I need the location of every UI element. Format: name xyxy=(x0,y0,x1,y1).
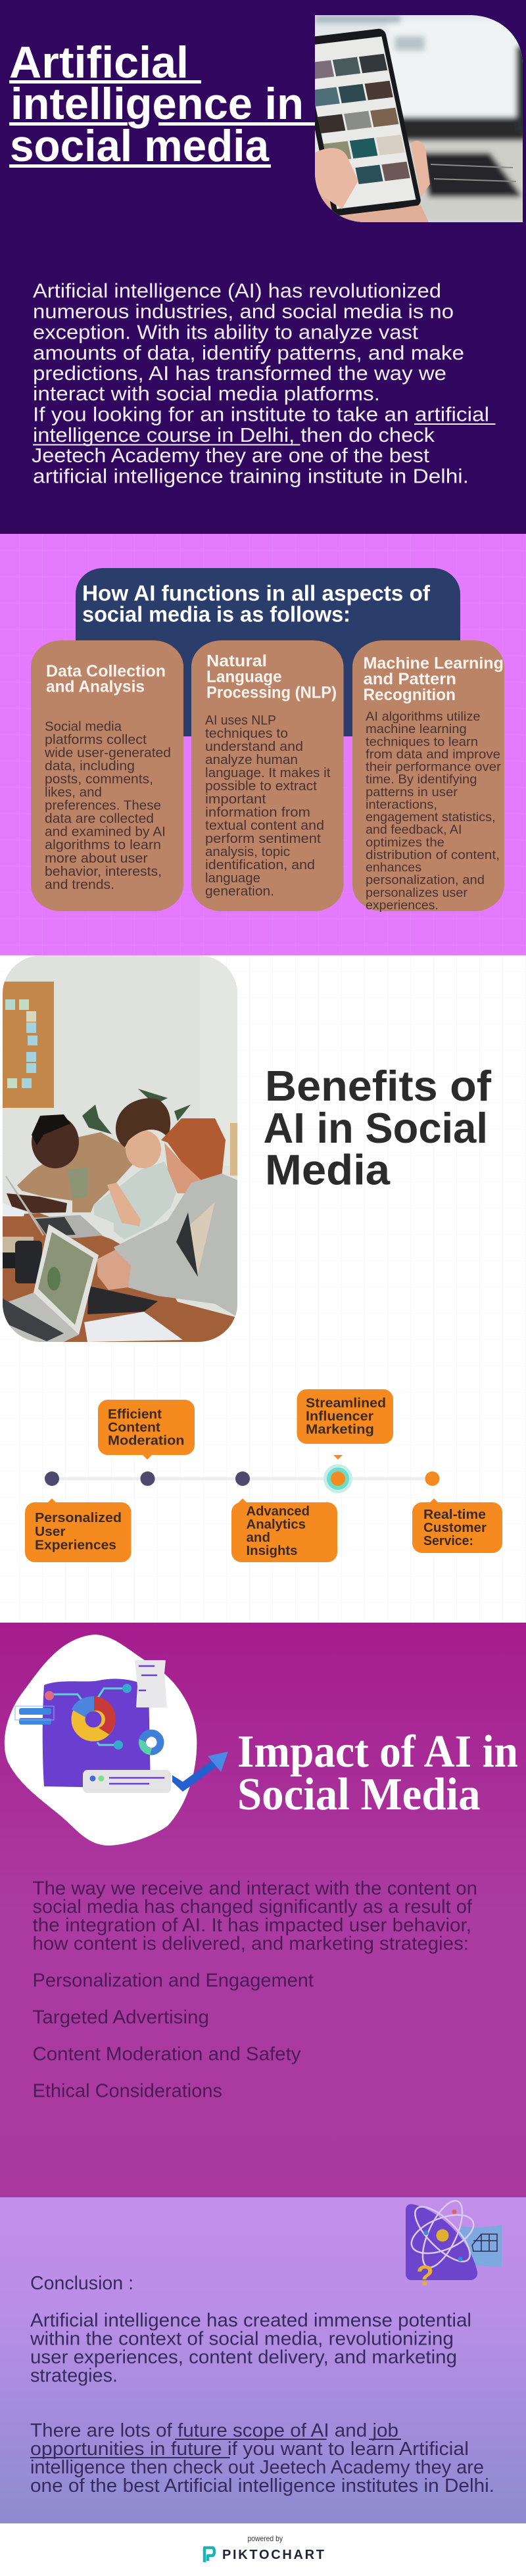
card: natural language processing: textual content and xyxy=(205,818,324,833)
conclusion paragraph: strategies. xyxy=(30,2365,118,2386)
title: social media xyxy=(10,121,270,171)
card: data collection: more about user xyxy=(45,851,148,866)
heading: benefits xyxy=(263,1062,491,1194)
conclusion paragraph xyxy=(30,2310,471,2386)
card: machine learning: experiences. xyxy=(366,898,439,913)
card: data collection: preferences. These xyxy=(45,798,161,813)
callout: efficient content moderation: Efficient xyxy=(108,1407,162,1422)
impact paragraph: social media has changed significantly as a result of xyxy=(33,1897,472,1918)
title: Artificial xyxy=(9,37,189,87)
icon: Piktochart logo xyxy=(204,2548,214,2562)
card: data collection: Social media xyxy=(45,719,122,734)
impact paragraph: how content is delivered, and marketing strategies: xyxy=(33,1934,469,1955)
panel: intro xyxy=(0,0,526,534)
impact paragraph: The way we receive and interact with the content on xyxy=(33,1878,477,1899)
callout: advanced analytics and insights xyxy=(231,1498,337,1562)
card: machine learning: enhances xyxy=(366,861,421,875)
callout: streamlined influencer marketing: Streamlined xyxy=(306,1396,386,1411)
icon: atom with question mark xyxy=(406,2195,502,2292)
callout: streamlined influencer marketing xyxy=(297,1389,393,1460)
callout: efficient content moderation: Content xyxy=(108,1420,160,1435)
callout: advanced analytics and insights: Analytics xyxy=(246,1517,306,1532)
person right xyxy=(168,1174,237,1316)
card: natural language processing: generation. xyxy=(205,884,274,899)
title: intelligence in xyxy=(11,79,304,129)
card: data collection: Data Collection xyxy=(46,662,166,680)
navy header panel: How AI functions in all aspects of xyxy=(82,581,431,605)
heading: impact xyxy=(237,1727,518,1820)
card: data collection: platforms collect xyxy=(45,732,147,747)
card: machine learning: patterns in user xyxy=(366,785,458,799)
dot 4 highlighted xyxy=(323,1464,352,1493)
photo: hand holding phone in front of laptop xyxy=(315,15,523,222)
card: data collection: posts, comments, xyxy=(45,772,153,787)
callout: personalized user experiences xyxy=(25,1498,132,1562)
footer: powered by Piktochart: PIKTOCHART xyxy=(222,2548,324,2562)
card: natural language processing: understand and xyxy=(205,739,303,754)
card: machine learning xyxy=(352,640,504,913)
intro paragraph: intelligence course in Delhi, then do check xyxy=(33,423,435,446)
card: data collection: wide user-generated xyxy=(44,746,171,760)
card: data collection: algorithms to learn xyxy=(45,838,161,853)
card: machine learning: AI algorithms utilize xyxy=(366,709,481,724)
conclusion heading: Conclusion : xyxy=(30,2273,133,2294)
table and laptops xyxy=(3,1213,235,1342)
title xyxy=(9,37,315,171)
card: data collection: and trends. xyxy=(45,877,114,892)
intro paragraph xyxy=(32,279,496,488)
panel: benefits xyxy=(0,955,526,1623)
card: natural language processing: possible to extract xyxy=(205,778,317,794)
call to action paragraph: opportunities in future if you want to learn Artificial xyxy=(30,2439,469,2460)
panel: how AI functions xyxy=(0,534,526,955)
call to action paragraph: There are lots of future scope of AI and job xyxy=(30,2420,398,2441)
photo: coworkers at a table xyxy=(3,955,237,1342)
card: data collection: data, including xyxy=(45,759,135,773)
impact list: Ethical Considerations xyxy=(33,2080,222,2101)
dot 3 xyxy=(235,1471,250,1486)
call to action paragraph xyxy=(30,2420,494,2496)
callout: real-time customer service xyxy=(412,1498,502,1553)
card: machine learning: and Pattern xyxy=(363,670,456,688)
card: natural language processing: important xyxy=(205,792,266,807)
conclusion paragraph: within the context of social media, revolutionizing xyxy=(30,2328,454,2349)
callout: advanced analytics and insights: Advanced xyxy=(246,1504,310,1519)
intro paragraph: Artificial intelligence (AI) has revolutionized xyxy=(33,279,441,302)
card: data collection: and examined by AI xyxy=(45,824,166,840)
callout: advanced analytics and insights: Insights xyxy=(246,1543,297,1558)
impact list: Targeted Advertising xyxy=(33,2007,209,2028)
conclusion paragraph: Artificial intelligence has created immense potential xyxy=(30,2310,471,2331)
impact list: Content Moderation and Safety xyxy=(33,2043,301,2064)
card: data collection: data are collected xyxy=(45,811,154,826)
card: machine learning: personalizes user xyxy=(366,886,467,900)
callout: real-time customer service: Service: xyxy=(423,1533,473,1548)
card: machine learning: and feedback, AI xyxy=(366,823,462,837)
callout: personalized user experiences: User xyxy=(35,1524,66,1539)
card: natural language processing: Natural xyxy=(206,652,267,671)
footer: powered by Piktochart: powered by xyxy=(247,2534,283,2543)
card: machine learning: engagement statistics, xyxy=(366,810,496,824)
panel: conclusion xyxy=(0,2195,526,2523)
card: machine learning: machine learning xyxy=(366,722,467,736)
card: data collection: likes, and xyxy=(45,785,102,800)
navy header panel: social media is as follows: xyxy=(82,602,350,626)
card: machine learning: interactions, xyxy=(366,798,437,812)
dot 5 xyxy=(425,1471,439,1486)
call to action paragraph: one of the best Artificial intelligence institutes in Delhi. xyxy=(30,2475,494,2496)
card: natural language processing: language. It makes it xyxy=(205,765,331,780)
intro paragraph: exception. With its ability to analyze vast xyxy=(33,320,418,343)
card: data collection: and Analysis xyxy=(46,677,145,696)
heading: benefits: Media xyxy=(265,1145,391,1194)
card: data collection xyxy=(31,640,183,911)
card: natural language processing: AI uses NLP xyxy=(205,713,276,728)
callout: advanced analytics and insights: and xyxy=(246,1530,270,1545)
heading: benefits: AI in Social xyxy=(263,1104,488,1152)
callout: streamlined influencer marketing: Influencer xyxy=(306,1409,373,1424)
card: natural language processing: Processing (NLP) xyxy=(206,684,337,702)
callout: real-time customer service: Real-time xyxy=(423,1507,486,1522)
intro paragraph: If you looking for an institute to take an artificial xyxy=(33,402,489,426)
impact list: Personalization and Engagement xyxy=(33,1970,314,1992)
illustration: white blob with 3D chart xyxy=(5,1634,228,1846)
card: machine learning: personalization, and xyxy=(366,873,485,888)
card: machine learning: optimizes the xyxy=(366,835,444,849)
impact list xyxy=(33,1970,314,2101)
dot 2 xyxy=(141,1471,155,1486)
call to action paragraph: intelligence then check out Jeetech Academy they are xyxy=(30,2457,484,2478)
callout: personalized user experiences: Personalized xyxy=(35,1510,122,1525)
heading: impact: Social Media xyxy=(237,1769,480,1820)
dot 1 xyxy=(45,1471,59,1486)
footer: powered by Piktochart xyxy=(0,2523,526,2576)
card: natural language processing: techniques to xyxy=(205,726,288,741)
intro paragraph: Jeetech Academy they are one of the best xyxy=(32,444,429,467)
card: natural language processing: identification, and xyxy=(205,857,315,872)
intro paragraph: predictions, AI has transformed the way we xyxy=(33,362,446,385)
callout: real-time customer service: Customer xyxy=(423,1520,487,1535)
card: machine learning: Machine Learning xyxy=(363,654,504,673)
timeline xyxy=(25,1389,502,1562)
card: data collection: behavior, interests, xyxy=(45,864,162,879)
heading: benefits: Benefits of xyxy=(265,1062,491,1110)
card: machine learning: Recognition xyxy=(363,686,456,704)
card: natural language processing: analyze human xyxy=(205,752,298,767)
card: natural language processing: perform sentiment xyxy=(205,831,321,846)
card: machine learning: time. By identifying xyxy=(366,773,477,787)
card: natural language processing: Language xyxy=(206,668,282,686)
intro paragraph: interact with social media platforms. xyxy=(33,382,380,405)
card: natural language processing xyxy=(191,640,343,911)
intro paragraph: numerous industries, and social media is no xyxy=(33,300,454,323)
navy header panel xyxy=(76,568,460,736)
card: machine learning: techniques to learn xyxy=(366,734,478,749)
intro paragraph: artificial intelligence training institute in Delhi. xyxy=(33,464,469,488)
card: natural language processing: information from xyxy=(205,805,310,820)
intro paragraph: amounts of data, identify patterns, and make xyxy=(33,341,464,364)
person left xyxy=(17,1132,133,1212)
card: machine learning: distribution of content, xyxy=(366,847,500,862)
impact paragraph: the integration of AI. It has impacted user behavior, xyxy=(33,1915,471,1936)
card: natural language processing: language xyxy=(205,871,260,886)
card: machine learning: their performance over xyxy=(366,760,502,775)
phone xyxy=(315,29,421,216)
panel: impact xyxy=(0,1623,526,2197)
impact paragraph xyxy=(33,1878,477,1955)
person centre xyxy=(94,1162,178,1239)
conclusion paragraph: user experiences, content delivery, and marketing xyxy=(30,2347,457,2368)
card: natural language processing: analysis, topic xyxy=(205,844,290,859)
icon: atom with question mark: ? xyxy=(416,2260,434,2292)
callout: efficient content moderation xyxy=(98,1400,195,1460)
card: machine learning: from data and improve xyxy=(366,747,500,761)
callout: efficient content moderation: Moderation xyxy=(108,1433,184,1448)
callout: streamlined influencer marketing: Marketing xyxy=(306,1422,374,1437)
callout: personalized user experiences: Experiences xyxy=(35,1538,116,1553)
